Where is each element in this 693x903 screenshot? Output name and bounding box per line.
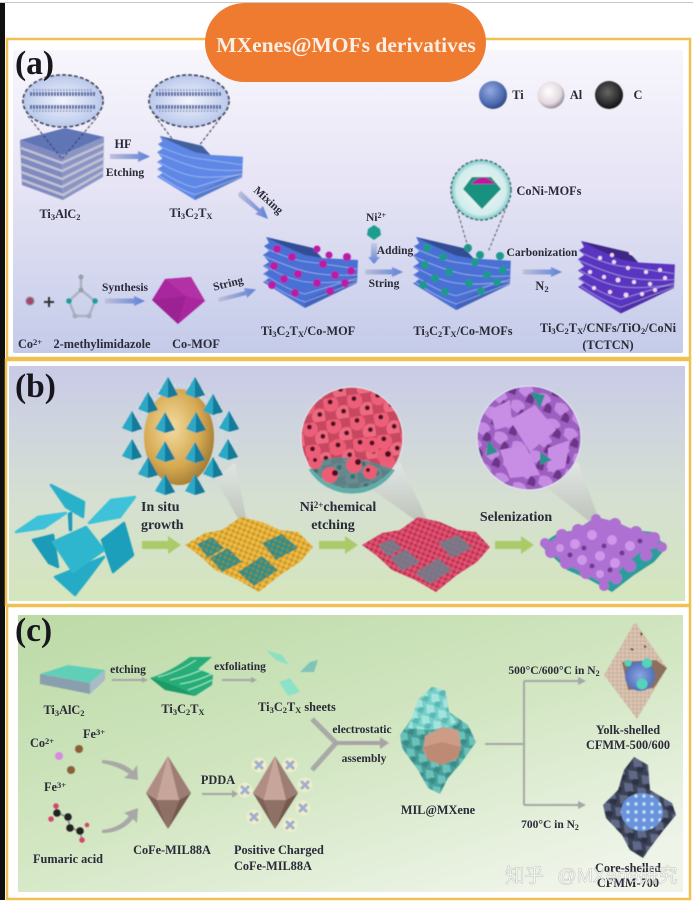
icon: gold core MOF cage: [122, 377, 239, 495]
icon: positive charged bipyramid: [238, 756, 312, 832]
arrow: curved acid to MIL88A: [102, 808, 138, 833]
panel a labels: T: [569, 321, 578, 335]
panel a labels: Ti: [39, 207, 51, 221]
panel a labels: [15, 45, 677, 352]
panel b labels: etching: [311, 518, 355, 533]
legend spheres: [479, 81, 623, 109]
panel a labels: 2+: [33, 337, 42, 347]
arrow: etching: [112, 677, 148, 683]
panel a labels: 2-methylimidazole: [54, 337, 151, 351]
icon: pink sheet: [362, 517, 490, 592]
panel c labels: Fe: [83, 727, 96, 741]
icon: Ti3C2Tx/Co-MOF stack: [263, 237, 358, 308]
panel a labels: Adding: [377, 245, 413, 257]
panel c labels: 3: [270, 705, 274, 715]
panel a labels: C: [185, 206, 194, 220]
panel b labels: chemical: [323, 500, 376, 515]
panel c labels: Core-shelled: [595, 861, 661, 875]
panel c labels: Ti: [43, 703, 55, 717]
panel b labels: 2+: [314, 500, 323, 510]
panel c: MIL@MXene derivatives: [7, 606, 690, 899]
arrow: carbonization: [523, 267, 562, 277]
icon: purple zoom cone: [545, 462, 600, 522]
arrow: string: [218, 288, 256, 302]
panel a labels: 2: [544, 284, 549, 294]
panel c labels: Ti: [258, 700, 270, 714]
panel b labels: growth: [141, 518, 184, 533]
panel a labels: (TCTCN): [582, 338, 634, 352]
arrow: mixing: [238, 191, 268, 219]
panel c labels: T: [190, 702, 199, 716]
panel a labels: 3: [272, 329, 276, 339]
panel a labels: Ni: [366, 212, 377, 224]
panel a labels: Al: [570, 88, 583, 102]
panel a labels: Mixing: [251, 185, 285, 217]
panel c labels: 2: [575, 823, 579, 832]
title pill: [205, 3, 486, 82]
panel a labels: /Co-MOF: [303, 324, 355, 338]
panel c labels: 2: [596, 669, 600, 678]
panel c labels: electrostatic: [332, 724, 392, 736]
panel a labels: X: [298, 329, 305, 339]
panel a labels: CoNi-MOFs: [517, 184, 582, 198]
panel c labels: MIL@MXene: [401, 803, 476, 817]
panel a labels: Synthesis: [102, 282, 149, 294]
panel a labels: T: [290, 324, 299, 338]
panel c labels: Co: [30, 736, 45, 750]
panel a labels: Etching: [106, 167, 144, 179]
panel a labels: T: [442, 324, 451, 338]
panel a labels: Carbonization: [507, 247, 578, 259]
icon: Ti3C2Tx/Co-MOFs stack: [413, 237, 511, 310]
icon: cyan MXene sheets: [16, 485, 135, 595]
panel c labels: 2: [186, 707, 190, 717]
panel c labels: AlC: [59, 703, 80, 717]
panel a labels: 3: [181, 211, 185, 221]
panel a labels: 2: [565, 326, 569, 336]
arrow: PDDA: [202, 790, 238, 798]
panel a labels: (a): [15, 45, 54, 82]
arrow: selenization: [495, 536, 534, 554]
panel c labels: C: [177, 702, 186, 716]
panel b labels: [15, 368, 552, 533]
arrow: adding: [368, 243, 380, 264]
panel c labels: 500°C/600°C in N: [508, 665, 596, 677]
icon: exfoliated flakes: [266, 650, 318, 696]
panel c labels: CFMM-500/600: [586, 738, 670, 752]
panel c labels: T: [287, 700, 296, 714]
panel a labels: 2: [76, 212, 81, 222]
arrow: Ni chemical etching: [319, 536, 358, 554]
panel c labels: CoFe-MIL88A: [234, 859, 312, 873]
panel c labels: C: [274, 700, 283, 714]
icon: Ni ion: [367, 225, 381, 240]
panel a labels: HF: [114, 137, 132, 151]
panel a labels: Ti: [413, 324, 425, 338]
panel a: MXene to TCTCN synthesis: [7, 39, 690, 358]
panel c labels: 3: [173, 707, 177, 717]
panel a labels: T: [198, 206, 207, 220]
panel a labels: Ti: [261, 324, 272, 338]
icon: Co and Fe ions: [55, 745, 83, 774]
icon: purple nanoflake sheet: [540, 514, 667, 592]
panel c labels: assembly: [342, 753, 387, 765]
icon: TCTCN purple stack: [578, 241, 675, 313]
panel a labels: N: [535, 279, 544, 293]
panel c labels: X: [198, 707, 205, 717]
panel c labels: (c): [15, 612, 52, 649]
panel a labels: /Co-MOFs: [456, 324, 513, 338]
icon: CoFe-MIL88A bipyramid: [146, 756, 191, 829]
panel a labels: 2+: [377, 211, 386, 220]
panel c labels: sheets: [301, 700, 336, 714]
panel a labels: C: [634, 88, 642, 102]
watermark: 知乎: [505, 865, 544, 887]
watermark: @MXene研究: [557, 865, 678, 887]
panel a labels: Ti: [512, 88, 524, 102]
title pill: MXenes@MOFs derivatives: [216, 33, 476, 57]
panel a labels: Co: [18, 337, 33, 351]
panel c labels: etching: [110, 664, 146, 676]
arrow: curved ions to MIL88A: [102, 760, 138, 780]
panel a labels: 3: [51, 212, 55, 222]
panel a labels: C: [429, 324, 438, 338]
icon: purple nanoflakes magnified: [477, 386, 581, 490]
panel a labels: X: [206, 211, 213, 221]
icon: MIL@MXene particle: [400, 687, 476, 794]
panel c labels: X: [295, 705, 302, 715]
panel a labels: String: [369, 278, 400, 290]
icon: Ti3AlC2 slab: [40, 665, 105, 694]
plus sign: [44, 297, 54, 307]
panel b labels: In situ: [141, 500, 180, 515]
panel c labels: Positive Charged: [234, 843, 324, 857]
icon: gold sheet zoom cone: [215, 463, 247, 522]
panel a labels: AlC: [55, 207, 76, 221]
icon: Ti3AlC2 layered block: [20, 128, 104, 200]
panel c labels: CFMM-700: [597, 876, 659, 890]
arrow: string second: [365, 267, 403, 277]
panel a labels: Ti: [540, 321, 551, 335]
icon: green Ti3C2Tx sheets: [150, 657, 213, 696]
icon: Co-MOF polyhedron: [152, 277, 205, 324]
panel c labels: PDDA: [201, 773, 235, 787]
panel a labels: /CoNi: [644, 321, 677, 335]
arrow: electrostatic assembly connector: [312, 719, 389, 770]
icon: 2-methylimidazole molecule: [66, 274, 98, 318]
panel a labels: 3: [425, 329, 429, 339]
arrow: in situ growth: [142, 536, 181, 554]
panel a labels: C: [556, 321, 565, 335]
arrow: synthesis: [105, 296, 145, 306]
left black edge: [0, 3, 5, 900]
panel b: in situ growth, etching, selenization: [6, 360, 690, 605]
icon: core-shelled particle: [603, 757, 676, 858]
panel a labels: String: [212, 274, 245, 294]
panel c labels: 3: [55, 708, 59, 718]
panel c labels: 700°C in N: [521, 819, 575, 831]
panel b labels: Selenization: [480, 510, 552, 525]
icon: Ti3C2Tx etched stack: [157, 136, 243, 200]
panel a labels: 2: [285, 329, 290, 339]
panel a labels: X: [450, 329, 457, 339]
panel c labels: CoFe-MIL88A: [133, 843, 211, 857]
panel c labels: 2: [80, 708, 85, 718]
icon: fumaric acid molecule: [48, 803, 89, 843]
icon: Co ion: [26, 297, 34, 305]
panel a labels: Co-MOF: [172, 337, 220, 351]
panel c labels: Ti: [161, 702, 173, 716]
panel c labels: 3+: [57, 780, 66, 790]
arrow: temperature branch: [485, 677, 586, 809]
icon: magnifier over Ti3AlC2: [23, 75, 103, 159]
panel a labels: 2: [641, 326, 645, 336]
arrow: exfoliating: [222, 677, 257, 683]
panel c labels: [15, 612, 670, 890]
panel a labels: Ti: [169, 206, 181, 220]
panel c labels: exfoliating: [214, 661, 266, 673]
panel c labels: 3+: [96, 727, 105, 737]
panel c labels: Yolk-shelled: [596, 723, 660, 737]
icon: pink zoom cone: [370, 462, 428, 522]
panel a labels: 2: [194, 211, 198, 221]
panel a labels: X: [577, 326, 584, 336]
panel b labels: Ni: [300, 500, 314, 515]
panel c labels: 2: [283, 705, 287, 715]
icon: CoNi-MOFs magnifier: [451, 160, 511, 254]
panel a labels: 3: [551, 326, 556, 336]
panel a labels: C: [276, 324, 285, 338]
panel a labels: /CNFs/TiO: [582, 321, 641, 335]
panel c labels: 2+: [45, 736, 54, 746]
panel a labels: 2: [438, 329, 442, 339]
panel c labels: Fumaric acid: [33, 852, 103, 866]
icon: gold MOF sheet: [185, 517, 313, 592]
icon: yolk-shelled particle: [604, 622, 667, 719]
panel b labels: (b): [15, 368, 56, 405]
icon: pink hollow spheres magnified: [301, 387, 403, 494]
icon: magnifier over Ti3C2Tx: [149, 75, 229, 160]
panel c labels: Fe: [44, 780, 57, 794]
arrow: HF etching: [110, 151, 150, 162]
